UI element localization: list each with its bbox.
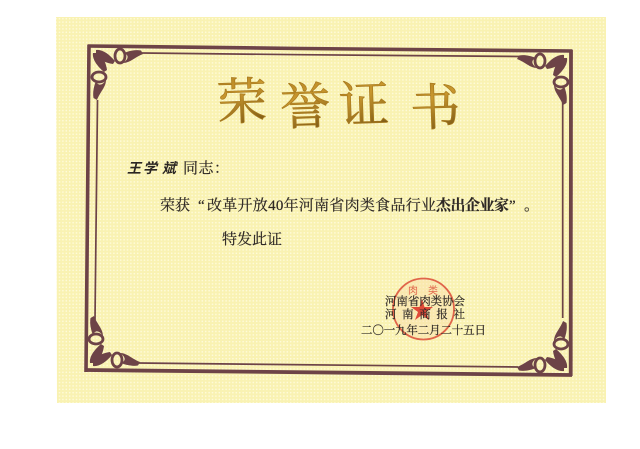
award statement: 。 — [524, 198, 539, 214]
title: gold calligraphy: 证 — [338, 64, 390, 138]
corner ornament: bottom right — [517, 321, 568, 372]
recipient name: 同志： — [183, 160, 229, 177]
award statement: 杰出企业家 — [436, 196, 509, 214]
title: gold calligraphy: 书 — [409, 67, 461, 141]
award statement: 荣获 — [160, 196, 190, 214]
award statement — [160, 196, 539, 214]
issuing organisations and date: 二〇一九年二月二十五日 — [361, 323, 486, 337]
recipient name: 王学斌 — [127, 158, 179, 178]
corner ornament: bottom left — [89, 316, 140, 367]
corner ornament: top right — [517, 54, 568, 105]
award statement: “ — [198, 198, 205, 214]
ornate double-line border — [84, 45, 572, 376]
issuing organisations and date — [361, 294, 486, 337]
title: gold calligraphy — [216, 61, 461, 141]
award statement: 改革开放40年河南省肉类食品行业 — [207, 196, 436, 214]
award statement: ” — [509, 198, 516, 214]
red round seal — [393, 278, 454, 340]
issuing organisations and date: 河 南 商 报 社 — [385, 307, 466, 321]
recipient name — [127, 158, 229, 178]
corner ornament: top left — [92, 49, 143, 100]
certificate paper — [56, 17, 606, 403]
special issue line: 特发此证 — [222, 231, 282, 248]
issuing organisations and date: 河南省肉类协会 — [385, 294, 466, 308]
red round seal: 肉类 — [408, 282, 438, 297]
title: gold calligraphy: 荣 — [216, 61, 268, 135]
title: gold calligraphy: 誉 — [279, 66, 331, 140]
